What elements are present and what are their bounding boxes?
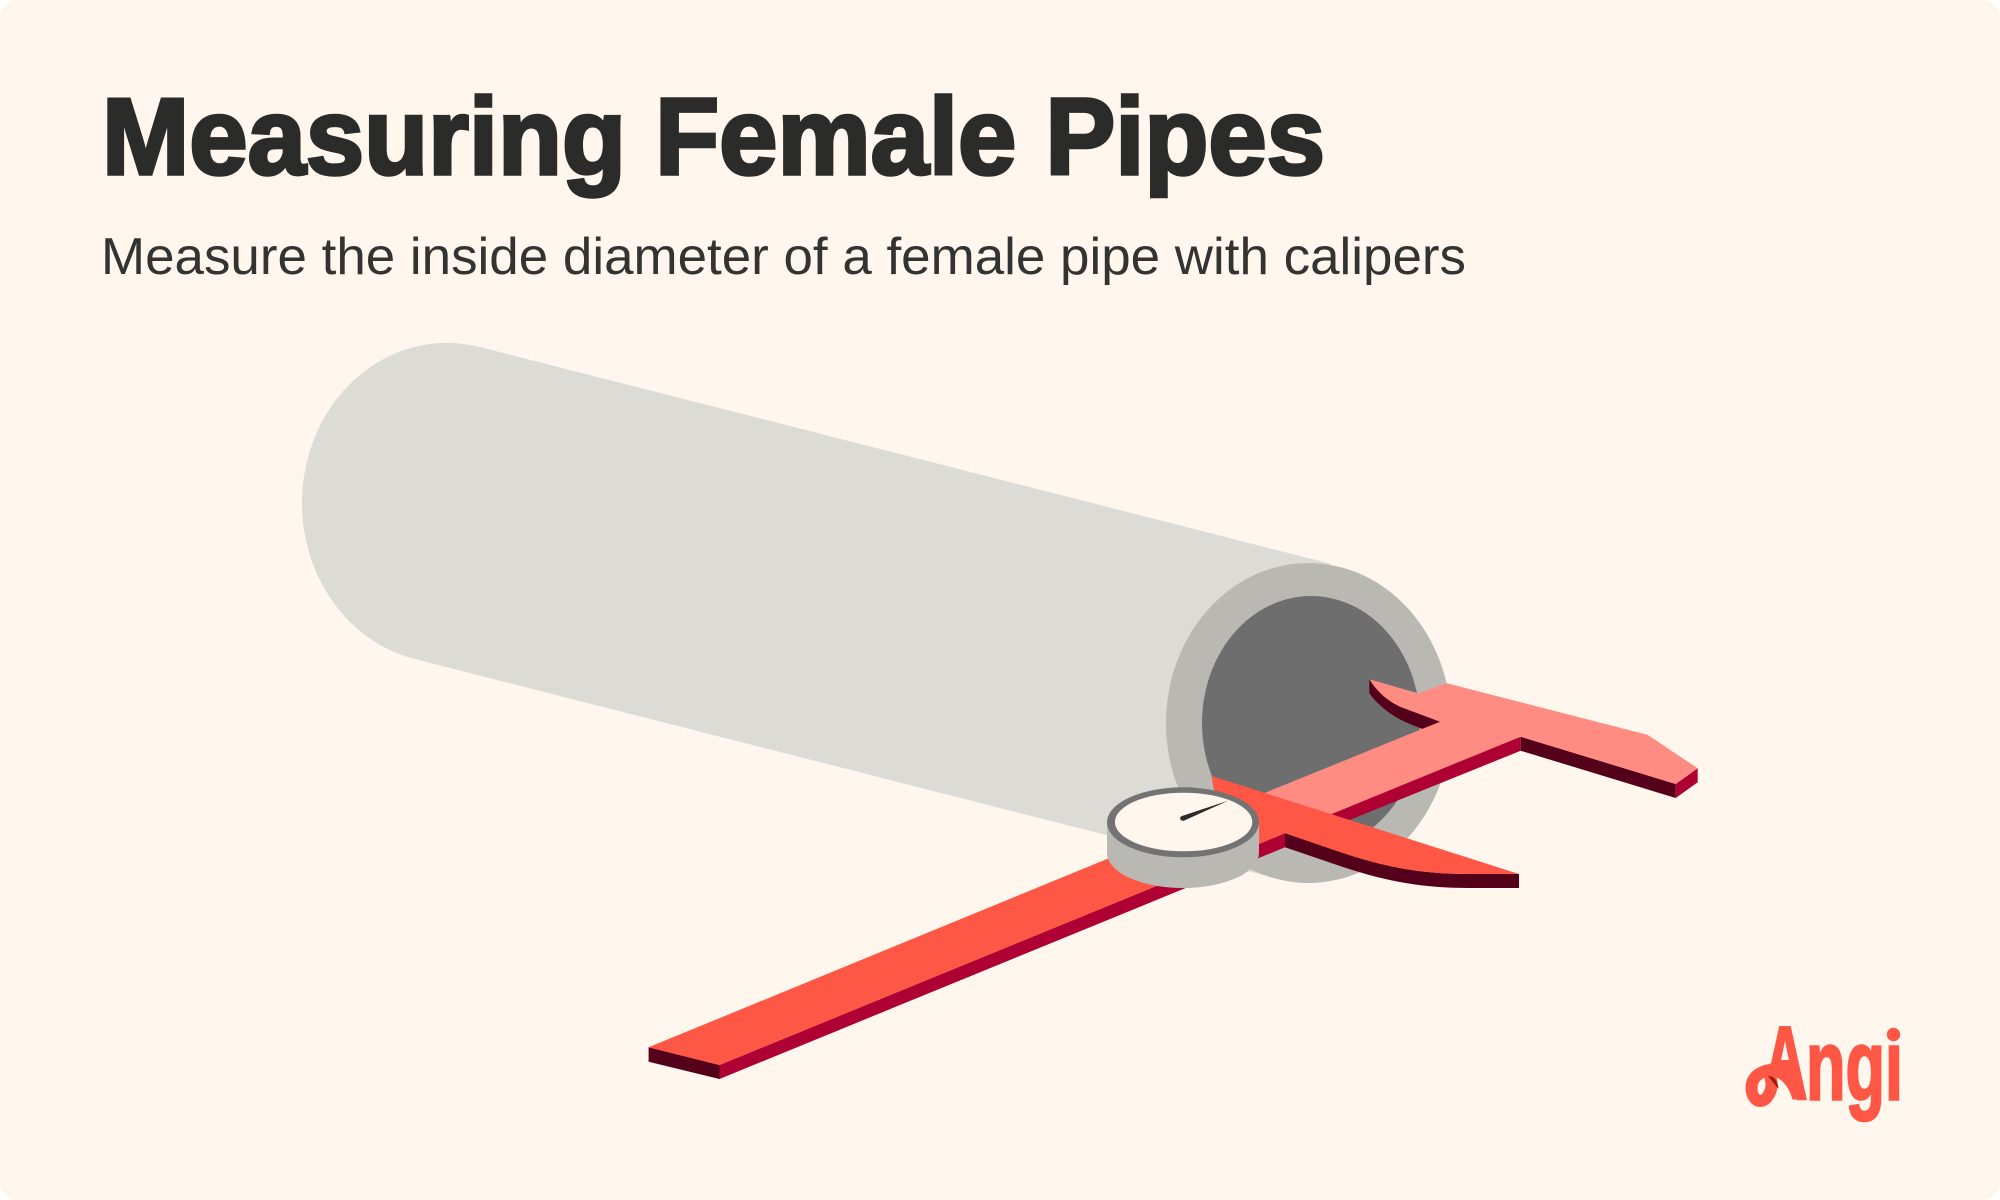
dial gauge <box>1107 787 1259 888</box>
gauge body <box>1107 822 1259 888</box>
upper jaw inner side <box>1369 679 1440 736</box>
main beam side <box>720 833 1285 1079</box>
pipe opening <box>1202 596 1420 850</box>
upper bar side <box>1300 737 1521 832</box>
logo wordmark: A <box>1762 1004 1808 1122</box>
gauge rim <box>1107 787 1259 857</box>
gauge needle <box>1180 801 1228 821</box>
logo right leg <box>1769 1060 1806 1100</box>
logo wordmark letters: ngi <box>1806 1010 1903 1122</box>
upper jaw and bar top <box>1240 679 1698 827</box>
upper jaw tip side <box>1676 768 1698 798</box>
gauge face <box>1115 793 1252 851</box>
logo letter cleanup <box>1745 1020 1904 1102</box>
subtitle: Measure the inside diameter of a female pipe with calipers <box>101 228 1466 286</box>
main beam and lower jaw top <box>649 776 1519 1065</box>
Angi logo <box>1745 1004 1904 1122</box>
pipe front ring <box>1166 563 1451 883</box>
logo loop <box>1752 1070 1781 1101</box>
title: Measuring Female Pipes <box>102 76 1325 198</box>
logo fold <box>1768 1076 1778 1089</box>
caliper illustration <box>649 679 1698 1079</box>
pipe body <box>302 343 1330 879</box>
upper jaw lower side <box>1521 737 1676 798</box>
main beam end <box>649 1047 720 1079</box>
logo dot <box>1887 1028 1900 1041</box>
lower jaw underside <box>1285 833 1519 888</box>
pipe illustration <box>302 343 1451 883</box>
